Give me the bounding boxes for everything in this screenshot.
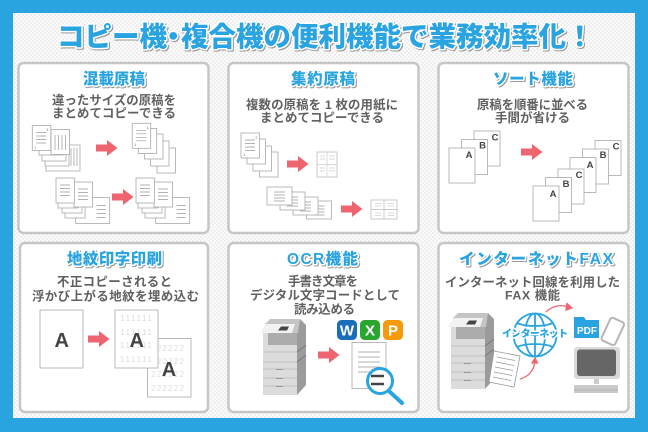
description: OCR <box>250 274 400 316</box>
icon: Word: W <box>340 322 355 340</box>
mixed stack 2 <box>56 178 110 224</box>
sorted stack 1: 1 <box>146 125 150 130</box>
heading: OCR: OCR機能 <box>287 249 358 268</box>
sorted sheets: B <box>600 150 607 161</box>
four-up sheet portrait <box>317 152 337 177</box>
portrait stack <box>241 133 278 177</box>
label: internet: インターネット <box>502 327 568 340</box>
description: internet FAX: FAX 機能 <box>505 288 561 302</box>
icon: PDF folder: PDF <box>577 326 597 337</box>
description: n-up originals: まとめてコピーできる <box>260 111 384 125</box>
panel: watermark printing <box>20 243 208 412</box>
watermarked copy 2: 222222 <box>151 357 185 366</box>
icon: magnifier <box>368 368 402 403</box>
sorted sheets: C <box>576 170 583 181</box>
watermarked copy 1: A <box>129 330 144 352</box>
original sheet <box>40 310 83 368</box>
description: sort: 手間が省ける <box>495 110 570 125</box>
sorted sheets: B <box>563 179 570 190</box>
description: internet FAX <box>445 274 620 302</box>
icon: PDF folder <box>574 317 599 338</box>
title: ・ <box>160 21 187 52</box>
mixed stack 1: 1 <box>34 145 37 150</box>
panel: sort <box>438 63 628 233</box>
icon: PowerPoint <box>383 320 403 340</box>
heading: internet FAX: インターネットFAX <box>459 250 614 268</box>
mixed stack 1: 1 <box>46 127 50 132</box>
description: n-up originals <box>246 97 398 125</box>
heading: sort: ソート機能 <box>493 69 573 88</box>
watermarked copy 1: 111111 <box>120 314 153 323</box>
panel: OCR <box>228 243 418 412</box>
original sheet: A <box>54 330 69 352</box>
description: OCR: 手書き文章を <box>288 274 358 288</box>
arrow <box>341 201 362 217</box>
watermarked copy 2: 222222 <box>151 370 185 379</box>
description: sort <box>477 97 588 125</box>
sorted sheets: A <box>550 189 557 200</box>
arrow <box>521 144 542 160</box>
unsorted sheets: B <box>479 140 486 152</box>
portrait stack: 1 <box>243 152 246 157</box>
watermarked copy 2: 222222 <box>151 344 185 353</box>
title: ！ <box>566 21 594 52</box>
sorted sheets: C <box>613 142 620 152</box>
arrow: paper to globe <box>520 358 538 379</box>
watermarked copy 2: 222222 <box>151 384 185 393</box>
heading: mixed originals: 混載原稿 <box>83 69 145 88</box>
icon: PowerPoint: P <box>388 322 398 340</box>
icon: Excel <box>360 320 380 340</box>
panel: n-up originals <box>228 63 418 233</box>
sorted sheets <box>533 140 621 221</box>
sorted sheets: A <box>587 160 594 171</box>
icon: copier <box>260 319 306 395</box>
icon: Excel: X <box>365 322 375 340</box>
unsorted sheets <box>449 131 500 183</box>
description: internet FAX: インターネット回線を利用した <box>445 274 620 290</box>
arrow: globe to devices <box>546 304 572 312</box>
title: コピー機 <box>57 21 167 52</box>
sorted stack 1 <box>132 123 176 173</box>
icon: copier <box>448 313 494 389</box>
description: OCR: 読み込める <box>294 302 355 316</box>
arrow <box>112 189 134 205</box>
watermarked copy 1 <box>115 310 158 368</box>
icon: globe <box>514 314 556 356</box>
description: OCR: デジタル文字コードとして <box>250 288 400 302</box>
description: watermark printing: 不正コピーされると <box>57 275 172 289</box>
description: watermark printing <box>32 275 199 304</box>
watermarked copy 1: 111111 <box>120 355 153 364</box>
arrow <box>318 347 340 363</box>
portrait stack: 1 <box>255 134 258 140</box>
four-up sheet landscape <box>371 200 397 219</box>
icon: paper <box>489 351 520 387</box>
watermarked copy 2: A <box>162 359 176 381</box>
description: sort: 原稿を順番に並べる <box>477 97 588 112</box>
description: mixed originals: まとめてコピーできる <box>52 106 176 120</box>
sorted stack 2 <box>136 178 190 224</box>
arrow <box>287 156 308 172</box>
watermarked copy 2 <box>148 338 191 397</box>
watermarked copy 1: 111111 <box>120 328 153 337</box>
icon: computer <box>574 347 620 393</box>
description: mixed originals <box>52 92 176 120</box>
description: mixed originals: 違ったサイズの原稿を <box>52 92 176 108</box>
unsorted sheets: C <box>492 132 499 144</box>
heading: watermark printing: 地紋印字印刷 <box>67 249 162 268</box>
heading: n-up originals: 集約原稿 <box>291 69 355 88</box>
arrow <box>96 140 118 156</box>
sorted stack 1: 1 <box>134 142 137 147</box>
landscape stack <box>267 187 332 219</box>
unsorted sheets: A <box>466 150 473 161</box>
mixed stack 1 <box>32 126 80 171</box>
description: watermark printing: 浮かび上がる地紋を埋め込む <box>32 288 199 304</box>
description: n-up originals: 複数の原稿を 1 枚の用紙に <box>246 97 398 112</box>
icon: smartphone <box>601 317 625 346</box>
watermarked copy 1: 111111 <box>120 341 153 350</box>
panel: internet FAX <box>438 243 628 412</box>
icon: document <box>352 342 386 388</box>
arrow <box>88 331 110 347</box>
panel: mixed originals <box>18 63 208 233</box>
icon: Word <box>337 320 357 340</box>
title: 複合機の便利機能で業務効率化 <box>181 21 566 52</box>
